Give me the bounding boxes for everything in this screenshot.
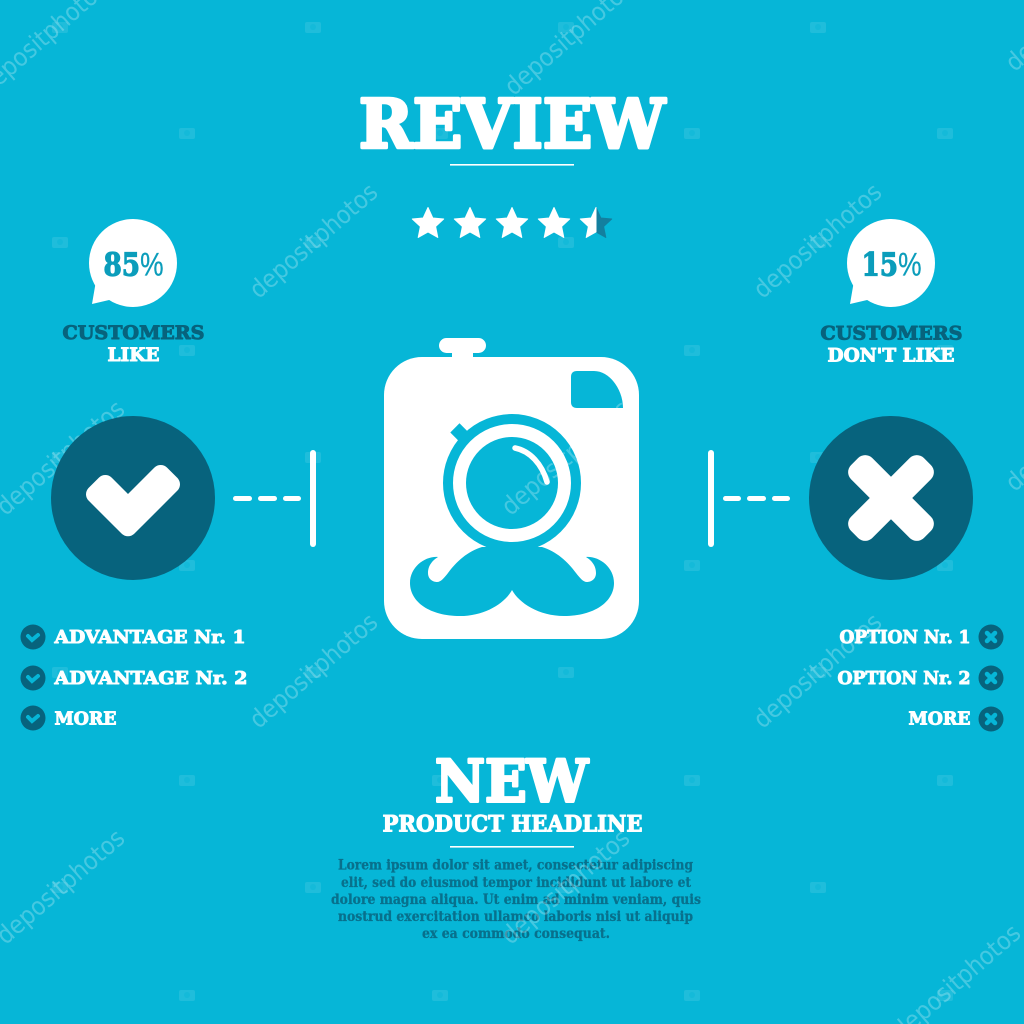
connector: left <box>233 450 316 547</box>
watermarks over artwork: depositphotos <box>496 823 635 950</box>
right caption: customers don't like <box>820 322 962 366</box>
list: options: MORE <box>908 708 970 730</box>
icon: cross circle <box>809 416 973 580</box>
left bubble: 85%: 85% <box>104 246 164 284</box>
list: options: OPTION Nr. 1 <box>840 627 970 648</box>
list: advantages: ADVANTAGE Nr. 1 <box>53 627 246 648</box>
body text: Lorem ipsum dolor sit amet, consectetur adipiscing <box>338 858 694 874</box>
right bubble: 15%: 15% <box>862 246 922 284</box>
body text: elit, sed do eiusmod tempor incididunt ut labore et <box>341 875 692 891</box>
left caption: customers like <box>62 322 204 366</box>
star rating <box>412 208 612 238</box>
left caption: customers like: CUSTOMERS <box>62 322 204 344</box>
right bubble: 15% <box>847 219 935 307</box>
left bubble: 85% <box>89 219 177 307</box>
heading underline <box>450 846 574 848</box>
heading: new: NEW <box>435 748 589 816</box>
icon: check circle <box>51 416 215 580</box>
title: review: REVIEW <box>359 84 667 164</box>
list: advantages: ADVANTAGE Nr. 2 <box>53 668 248 689</box>
title underline <box>450 164 574 166</box>
body text: dolore magna aliqua. Ut enim ad minim veniam, quis <box>331 892 701 908</box>
list: advantages: MORE <box>54 708 116 730</box>
list: options: OPTION Nr. 2 <box>838 668 970 689</box>
watermark pattern: depositphotos <box>244 177 383 304</box>
watermark pattern: depositphotos <box>244 607 383 734</box>
list: options <box>838 624 1004 732</box>
body text: ex ea commodo consequat. <box>422 926 610 942</box>
icon: hipster camera <box>384 338 639 639</box>
body text <box>331 858 701 942</box>
list: advantages <box>20 624 248 730</box>
watermark pattern: depositphotos <box>748 607 887 734</box>
left caption: customers like: LIKE <box>108 344 160 366</box>
watermark pattern: depositphotos <box>748 177 887 304</box>
right caption: customers don't like: DON'T LIKE <box>828 344 954 366</box>
watermarks over artwork <box>496 394 635 950</box>
subheading: product headline: PRODUCT HEADLINE <box>382 812 642 838</box>
right caption: customers don't like: CUSTOMERS <box>820 322 962 344</box>
connector: right <box>708 450 790 547</box>
body text: nostrud exercitation ullamco laboris nisi ut aliquip <box>338 909 693 925</box>
watermarks over artwork: depositphotos <box>496 394 635 521</box>
